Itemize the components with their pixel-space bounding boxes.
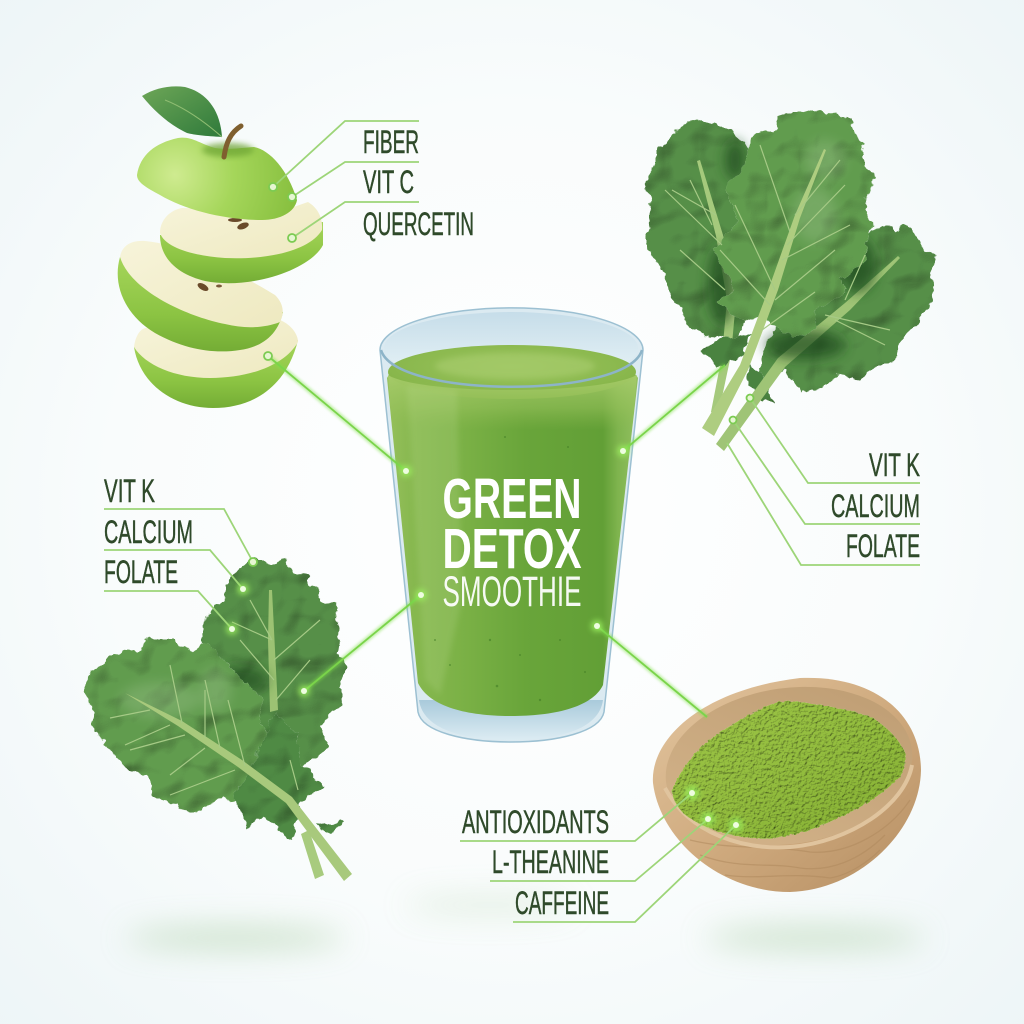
- labels: powder: L-THEANINE: [492, 844, 609, 880]
- center leaf sheen: [793, 140, 845, 243]
- bowl front rim: [665, 765, 912, 847]
- apple slice: third: [118, 241, 283, 351]
- smoothie flecks: [434, 436, 586, 701]
- right stem: [716, 256, 900, 451]
- labels: powder: CAFFEINE: [515, 885, 609, 921]
- callout lines: [104, 121, 920, 922]
- apple slice: bottom: [134, 320, 298, 408]
- labels: kale right: CALCIUM: [831, 488, 920, 524]
- smoothie surface: [388, 345, 636, 399]
- ground shadows: [125, 895, 925, 950]
- glass: [380, 308, 643, 742]
- labels: kale left: [104, 473, 193, 590]
- side veins: [110, 600, 320, 795]
- overlap shadow: [212, 666, 281, 786]
- right leaf: [760, 227, 935, 390]
- left leaf: [85, 640, 270, 810]
- apple leaf: [142, 86, 222, 137]
- left leaf sheen: [120, 668, 231, 718]
- smoothie body: [387, 353, 638, 716]
- labels: apple: FIBER: [363, 124, 419, 160]
- overlap shadow: [708, 140, 876, 360]
- apple slice: second: [160, 202, 323, 283]
- bowl: [653, 672, 923, 892]
- labels: kale right: FOLATE: [846, 528, 920, 564]
- glass highlight: [407, 385, 462, 695]
- connector lines: ingredients to glass: [268, 356, 725, 717]
- apple stem: [224, 126, 241, 157]
- glass body: [380, 308, 643, 742]
- pale band below rim: [388, 375, 637, 430]
- left leaf midrib: [697, 160, 736, 416]
- labels: kale left: FOLATE: [104, 554, 178, 590]
- labels: powder: [462, 804, 609, 921]
- kale: top right: [647, 110, 935, 451]
- lower leaflets: [235, 713, 345, 837]
- stems: [125, 693, 352, 881]
- labels: kale left: VIT K: [104, 473, 155, 509]
- labels: apple: [363, 124, 474, 242]
- title: GREEN: [442, 467, 582, 531]
- title: SMOOTHIE: [442, 568, 582, 616]
- bowl interior: [655, 672, 923, 860]
- top leaf midrib: [268, 590, 278, 712]
- connector glow: [268, 356, 725, 717]
- glass front rim: [381, 350, 642, 387]
- labels: kale left: CALCIUM: [104, 514, 193, 550]
- title: DETOX: [442, 517, 582, 581]
- apple top: [137, 138, 297, 220]
- title: [442, 467, 582, 616]
- left leaf: [647, 120, 747, 340]
- labels: kale right: [831, 447, 920, 564]
- side veins: [665, 145, 890, 345]
- kale: bottom left: [85, 560, 352, 881]
- center leaf: [716, 110, 873, 337]
- lower leaflets: [700, 333, 774, 405]
- powder: [672, 701, 905, 838]
- bowl grain: [690, 800, 910, 878]
- top leaf: [205, 560, 345, 775]
- glass base: [419, 700, 603, 740]
- labels: powder: ANTIOXIDANTS: [462, 804, 609, 840]
- bowl body: [653, 678, 921, 892]
- labels: apple: VIT C: [363, 164, 414, 200]
- labels: kale right: VIT K: [869, 447, 920, 483]
- center midrib: [702, 149, 826, 436]
- apple: [118, 86, 323, 408]
- labels: apple: QUERCETIN: [363, 206, 474, 242]
- callout dots: [226, 183, 754, 832]
- glass inner rim: [384, 312, 638, 384]
